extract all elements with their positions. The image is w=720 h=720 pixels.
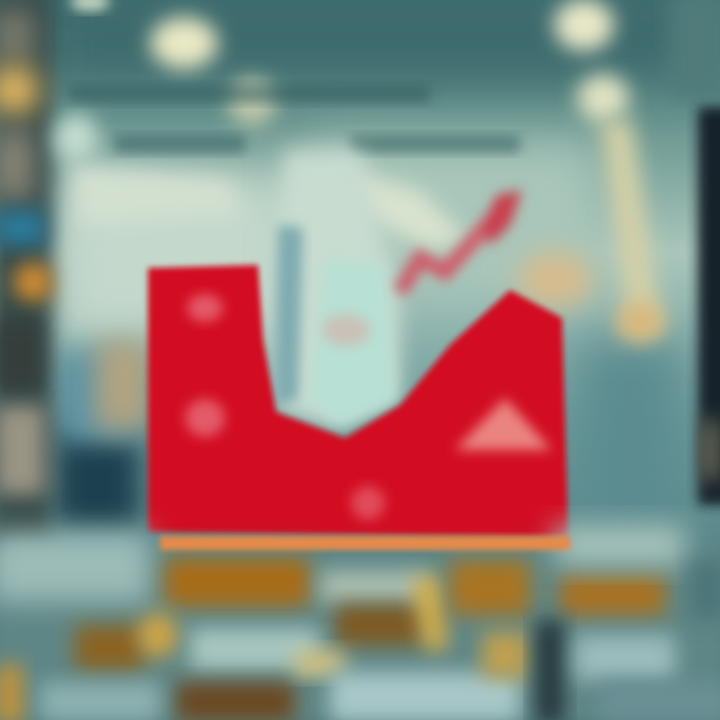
icon: bottom marker xyxy=(351,486,385,520)
icon: top marker xyxy=(187,294,223,322)
bottom: gold and teal blocks xyxy=(0,525,720,720)
background: blurred room xyxy=(50,0,690,530)
icon: middle marker xyxy=(185,399,225,437)
icon: right marker xyxy=(455,398,552,450)
left edge: dark column with colored blocks xyxy=(0,0,53,550)
center glass panel xyxy=(270,150,400,430)
trend arrow xyxy=(400,190,522,292)
ceiling lights xyxy=(54,0,664,342)
right edge: dark column xyxy=(670,0,720,505)
orange base strip xyxy=(160,536,570,550)
blurred heading text xyxy=(70,85,520,153)
warm glow behind chart xyxy=(517,252,593,308)
red area chart xyxy=(148,265,568,538)
